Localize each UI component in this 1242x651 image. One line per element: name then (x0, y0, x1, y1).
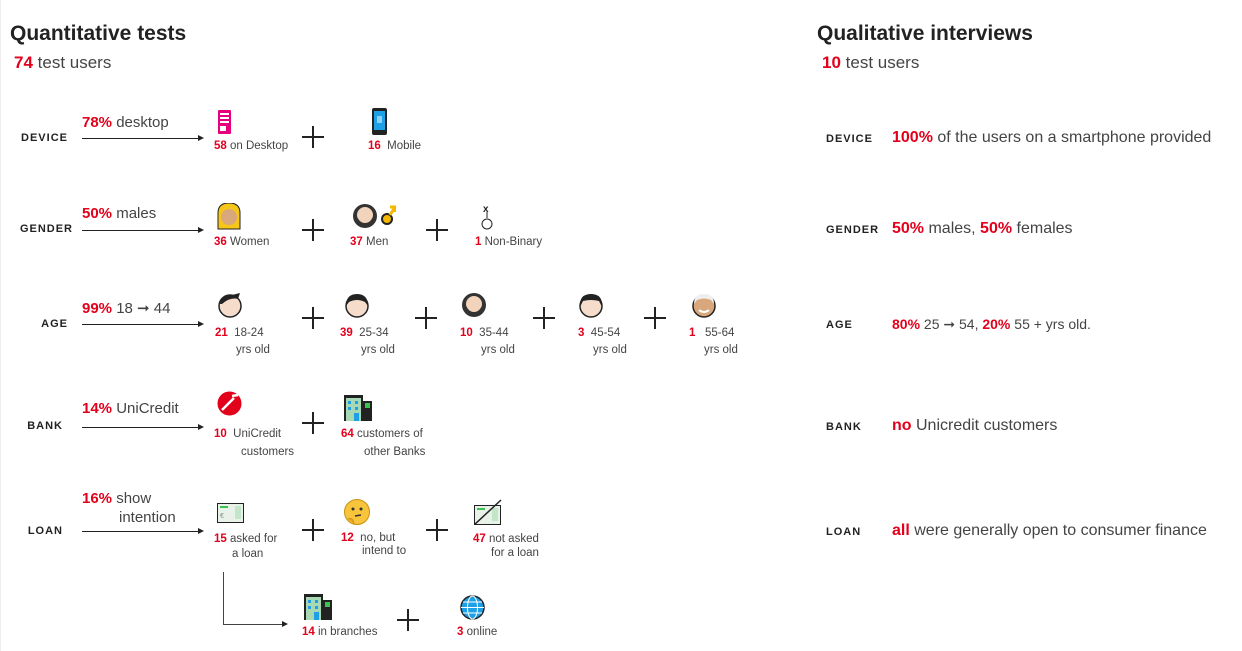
label gender: GENDER (20, 223, 73, 235)
plus (302, 307, 324, 329)
text 47 not asked for a loan (473, 532, 539, 560)
text 15 asked for a loan: a loan (232, 548, 263, 560)
row: gender (20, 203, 542, 248)
caption 78% desktop: 78% desktop (82, 114, 169, 131)
label bank: BANK (27, 420, 63, 432)
row: loan channels (300, 592, 520, 642)
caption 16% show intention: intention (119, 509, 176, 526)
icon bank building (344, 395, 372, 421)
plus (415, 307, 437, 329)
subtitle: 74 test users: 74 test users (14, 53, 111, 72)
icon face 25-34 (345, 294, 369, 318)
loan text: all were generally open to consumer finance (892, 522, 1207, 539)
gender: GENDER (826, 224, 879, 236)
icon cash: € (220, 513, 224, 520)
label age: AGE (41, 318, 68, 330)
icon thinking face (344, 499, 370, 525)
title: quantitative: Quantitative tests (10, 22, 186, 45)
elbow arrow to loan channels (223, 572, 289, 626)
plus (426, 219, 448, 241)
age text: 80% 25 ➞ 54, 20% 55 + yrs old. (892, 316, 1091, 332)
arrow (82, 427, 200, 428)
caption 16% show intention: 16% show (82, 490, 151, 507)
label loan: LOAN (28, 525, 63, 537)
left edge line (0, 0, 1, 651)
text 37 men: 37 Men (350, 236, 388, 248)
device: DEVICE (826, 133, 873, 145)
icon globe (460, 595, 485, 620)
text 39 25-34: 39 25-34 (340, 327, 389, 339)
text 15 asked for a loan (214, 533, 278, 560)
row: loan (28, 490, 539, 560)
icon desktop (218, 110, 231, 134)
text 3 45-54 (578, 327, 627, 356)
text 47 not asked for a loan: 47 not asked (473, 533, 539, 545)
text 36 women: 36 Women (214, 236, 269, 248)
text 10 35-44: 10 35-44 (460, 327, 509, 339)
icon face 55-64 (692, 294, 716, 318)
text 12 no but intend to: 12 no, but (341, 532, 395, 544)
text 21 18-24 (215, 327, 270, 356)
caption 14% unicredit: 14% UniCredit (82, 400, 179, 417)
row: bank (27, 392, 425, 458)
plus (302, 519, 324, 541)
icon mobile (372, 108, 387, 135)
text 12 no but intend to: intend to (362, 545, 406, 557)
arrow (82, 230, 200, 231)
plus (397, 609, 419, 631)
text 1 55-64 (689, 327, 738, 356)
text 64 customers of other banks: other Banks (364, 446, 425, 458)
icon face 18-24 (218, 293, 242, 318)
arrow (82, 531, 200, 532)
text 1 55-64: yrs old (704, 344, 738, 356)
title: qualitative: Qualitative interviews (817, 22, 1033, 45)
text 10 unicredit customers: 10 UniCredit (214, 428, 281, 440)
icon cash crossed (474, 499, 502, 525)
icon unicredit logo (218, 392, 242, 416)
text 10 35-44: yrs old (481, 344, 515, 356)
icon non-binary: x (483, 204, 489, 215)
text 39 25-34: yrs old (361, 344, 395, 356)
text 3 45-54: 3 45-54 (578, 327, 620, 339)
text 14 in branches: 14 in branches (302, 626, 377, 638)
subtitle: 10 test users: 10 test users (822, 53, 919, 72)
label device: DEVICE (21, 132, 68, 144)
bank: BANK (826, 421, 862, 433)
caption 16% show intention (82, 490, 176, 526)
text 1 non-binary: 1 Non-Binary (475, 236, 542, 248)
plus (302, 412, 324, 434)
text 10 unicredit customers (214, 428, 294, 458)
plus (533, 307, 555, 329)
plus (302, 219, 324, 241)
icon non-binary (482, 204, 492, 230)
text 64 customers of other banks (341, 428, 425, 458)
icon face 45-54 (579, 294, 603, 318)
text 15 asked for a loan: 15 asked for (214, 533, 277, 545)
text 12 no but intend to (341, 532, 406, 557)
plus (426, 519, 448, 541)
text 3 online: 3 online (457, 626, 497, 638)
caption 99% 18-44: 99% 18 ➞ 44 (82, 300, 170, 317)
icon face 35-44 bearded (462, 293, 486, 317)
arrow (82, 324, 200, 325)
device text: 100% of the users on a smartphone provided (892, 129, 1211, 146)
plus (644, 307, 666, 329)
text 16 mobile: 16 Mobile (368, 140, 421, 152)
text 21 18-24: 21 18-24 (215, 327, 264, 339)
text 47 not asked for a loan: for a loan (491, 547, 539, 559)
text 39 25-34 (340, 327, 395, 356)
loan: LOAN (826, 526, 861, 538)
icon branches building (304, 594, 332, 620)
text 10 35-44 (460, 327, 515, 356)
row: device (21, 108, 421, 152)
text 3 45-54: yrs old (593, 344, 627, 356)
age: AGE (826, 319, 853, 331)
text 21 18-24: yrs old (236, 344, 270, 356)
text 1 55-64: 1 55-64 (689, 327, 734, 339)
text 10 unicredit customers: customers (241, 446, 294, 458)
plus (302, 126, 324, 148)
gender text: 50% males, 50% females (892, 220, 1073, 237)
caption 50% males: 50% males (82, 205, 156, 222)
icon man with male symbol (353, 204, 396, 228)
icon cash (217, 503, 244, 523)
text 64 customers of other banks: 64 customers of (341, 428, 423, 440)
panel: qualitative rows (820, 125, 1230, 545)
icon woman (218, 203, 240, 230)
bank text: no Unicredit customers (892, 417, 1057, 434)
text 58 on desktop: 58 on Desktop (214, 140, 288, 152)
arrow (82, 138, 200, 139)
row: age (41, 293, 738, 356)
